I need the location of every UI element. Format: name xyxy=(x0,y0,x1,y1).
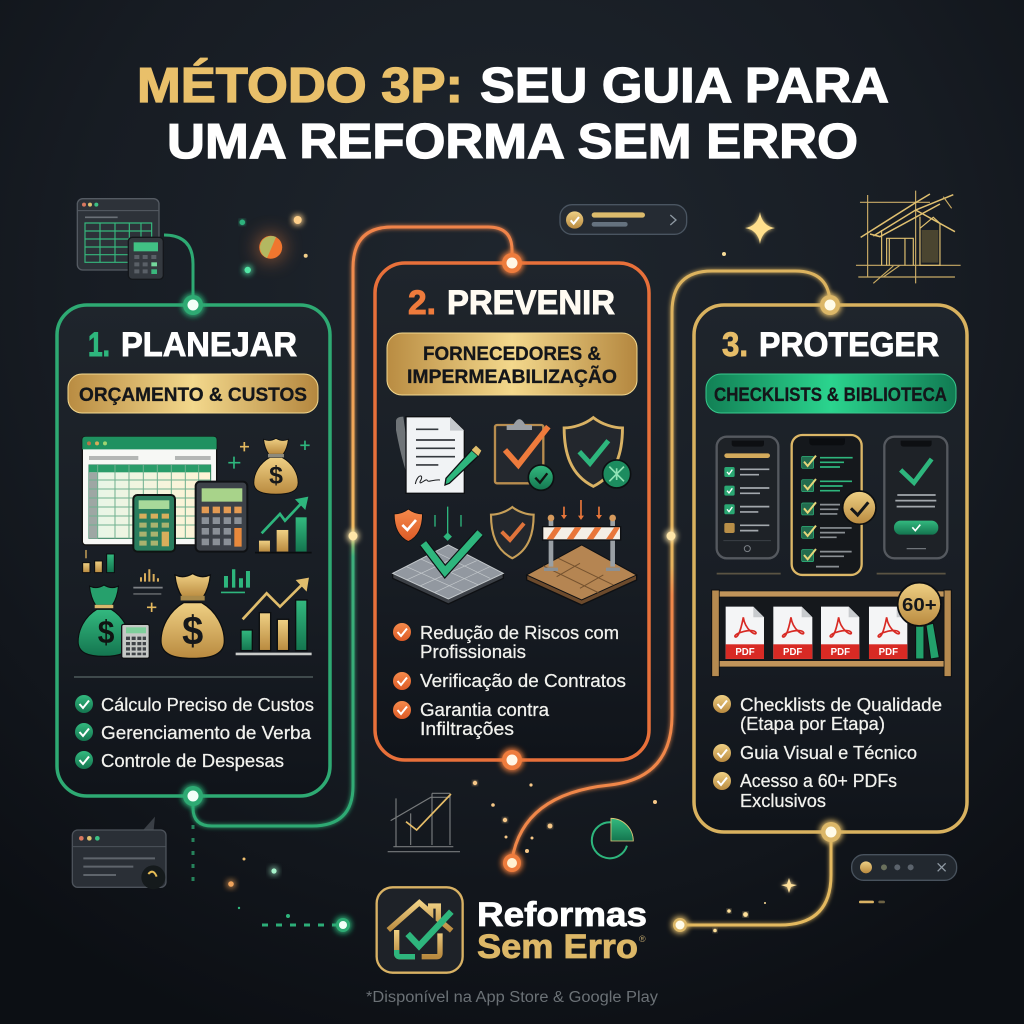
icon: small money bag xyxy=(254,438,298,494)
bullet list: Prevenir xyxy=(393,623,626,739)
heading: 2. Prevenir: PREVENIR xyxy=(447,284,615,322)
panel: 3 Proteger xyxy=(694,305,967,832)
icon: wooden shelf xyxy=(712,590,951,677)
widget: spreadsheet and calculator xyxy=(77,199,163,279)
icon: PDF file 3 xyxy=(821,607,859,659)
footnote: *Disponível na App Store & Google Play xyxy=(366,989,658,1006)
heading: 1. Planejar: PLANEJAR xyxy=(121,326,297,364)
decorative: phone shelf lines xyxy=(717,571,946,576)
icon: green calculator xyxy=(133,495,175,552)
icon: green books xyxy=(916,623,939,659)
icon: PDF file 1: PDF xyxy=(735,647,755,658)
icon: small green bars xyxy=(221,569,250,593)
logo: app icon xyxy=(377,887,463,973)
badge: 60+: 60+ xyxy=(902,594,937,615)
bullet list: Proteger: Guia Visual e Técnico xyxy=(740,743,917,763)
icon: barrier on wood floor xyxy=(527,500,637,605)
heading: 1. Planejar: 1. xyxy=(88,326,110,364)
bullet list: Proteger: Acesso a 60+ PDFs xyxy=(740,771,897,791)
heading: 2. Prevenir: 2. xyxy=(408,284,436,322)
widget: message window bottom left xyxy=(72,817,166,889)
icon: rising bar chart green arrow xyxy=(255,497,312,553)
divider xyxy=(74,676,313,678)
bullet list: Planejar: Cálculo Preciso de Custos xyxy=(101,695,314,715)
icon: green down arrows xyxy=(435,507,461,540)
decorative: small gold dot xyxy=(722,252,726,256)
connector: green to spreadsheet widget xyxy=(164,235,193,305)
decorative: gold sparkles bottom right xyxy=(713,878,797,932)
icon: phone with confirmation xyxy=(884,437,947,558)
logo: wordmark: ® xyxy=(639,934,646,944)
icon: PDF file 3: PDF xyxy=(831,647,850,658)
pill: Fornecedores e Impermeabilização: FORNECEDORES & xyxy=(423,343,601,365)
title: MÉTODO 3P: xyxy=(137,57,463,113)
connector: orange and green rail on left xyxy=(193,227,512,826)
icon: plus gold xyxy=(147,442,249,612)
icon: small money bag: $ xyxy=(269,463,283,490)
connector: orange and gold rail on right xyxy=(512,271,830,860)
icon: green money bag: $ xyxy=(98,614,115,650)
bullet list: Prevenir: Infiltrações xyxy=(420,719,514,739)
icon: large bar chart with gold arrow xyxy=(236,578,312,654)
logo: wordmark xyxy=(477,896,647,966)
logo: wordmark: Reformas xyxy=(477,896,647,934)
icon: pie chart xyxy=(592,818,633,858)
title xyxy=(137,57,889,169)
connector: gold to bottom node xyxy=(680,832,831,925)
bullet list: Proteger xyxy=(713,695,942,811)
icon: PDF file 4: PDF xyxy=(879,647,898,658)
icon: clipboard check xyxy=(495,419,554,490)
bullet list: Planejar: Gerenciamento de Verba xyxy=(101,723,312,743)
nodes: gold xyxy=(348,295,841,932)
icon: large money bag: $ xyxy=(182,609,203,654)
icon: small orange shield xyxy=(394,509,422,542)
icon: chart house sketch xyxy=(388,793,460,852)
badge: 60+ xyxy=(898,583,941,626)
pill: Fornecedores e Impermeabilização xyxy=(387,333,637,395)
bullet list: Prevenir: Verificação de Contratos xyxy=(420,671,626,691)
icon: gold shield with badge xyxy=(564,418,631,488)
decorative: glowing dots bottom left xyxy=(228,858,290,918)
icon: PDF file 2: PDF xyxy=(783,647,802,658)
connector: green dotted vertical xyxy=(192,825,194,889)
decorative: gold star xyxy=(745,212,775,244)
logo: wordmark: Sem Erro xyxy=(477,928,638,966)
connector: orange centre line xyxy=(510,760,514,863)
icon: dark calculator xyxy=(196,482,247,552)
icon: green money bag xyxy=(78,585,130,656)
icon: dark shield xyxy=(491,507,534,558)
panel: 1 Planejar xyxy=(57,305,330,796)
illustration: prevention icons xyxy=(393,417,637,605)
bullet list: Planejar xyxy=(75,695,314,771)
bullet list: Planejar: Controle de Despesas xyxy=(101,751,284,771)
nodes: orange xyxy=(502,253,522,872)
icon: tiny gold bars and rules xyxy=(133,569,163,594)
bullet list: Prevenir: Profissionais xyxy=(420,642,526,662)
heading: 3. Proteger: PROTEGER xyxy=(759,326,939,364)
decorative: orb and glowing dots top left xyxy=(240,216,308,273)
icon: small bars xyxy=(83,550,114,573)
icon: small grey calculator xyxy=(122,624,149,658)
bullet list: Proteger: (Etapa por Etapa) xyxy=(740,714,885,734)
illustration: finance icons xyxy=(78,437,312,658)
pill: Checklists e Biblioteca xyxy=(706,374,956,413)
icon: waterproofed tile with check xyxy=(393,533,503,604)
panel: 2 Prevenir xyxy=(375,263,649,760)
decorative: glowing dots bottom centre xyxy=(473,781,657,853)
icon: large money bag xyxy=(161,574,224,658)
icon: signed document xyxy=(396,417,481,493)
bullet list: Proteger: Exclusivos xyxy=(740,791,826,811)
icon: highlighted phone with checklist xyxy=(792,435,876,575)
bullet list: Prevenir: Redução de Riscos com xyxy=(420,623,619,643)
widget: progress pill top xyxy=(560,205,687,234)
icon: PDF file 1 xyxy=(726,607,764,659)
icon: spreadsheet window xyxy=(82,437,217,545)
icon: PDF file 2 xyxy=(773,607,812,659)
icon: phone with checklist xyxy=(717,437,778,558)
pill: Fornecedores e Impermeabilização: IMPERMEABILIZAÇÃO xyxy=(407,365,617,388)
bullet list: Prevenir: Garantia contra xyxy=(420,700,550,720)
bullet list: Proteger: Checklists de Qualidade xyxy=(740,695,942,715)
icon: PDF file 4 xyxy=(869,607,907,659)
pill: Orçamento e Custos: ORÇAMENTO & CUSTOS xyxy=(79,384,307,406)
connector: green dashed horizontal xyxy=(262,924,343,926)
pill: Checklists e Biblioteca: CHECKLISTS & BIBLIOTECA xyxy=(714,384,947,406)
widget: status pill bottom right xyxy=(852,855,957,903)
title: UMA REFORMA SEM ERRO xyxy=(167,114,858,169)
icon: architectural house sketch xyxy=(856,191,961,283)
pill: Orçamento e Custos xyxy=(68,374,318,413)
illustration: phones and PDF shelf xyxy=(712,435,951,677)
heading: 3. Proteger: 3. xyxy=(722,326,748,364)
title: SEU GUIA PARA xyxy=(480,58,889,113)
icon: plus signs xyxy=(228,441,310,469)
nodes: green xyxy=(183,295,350,932)
